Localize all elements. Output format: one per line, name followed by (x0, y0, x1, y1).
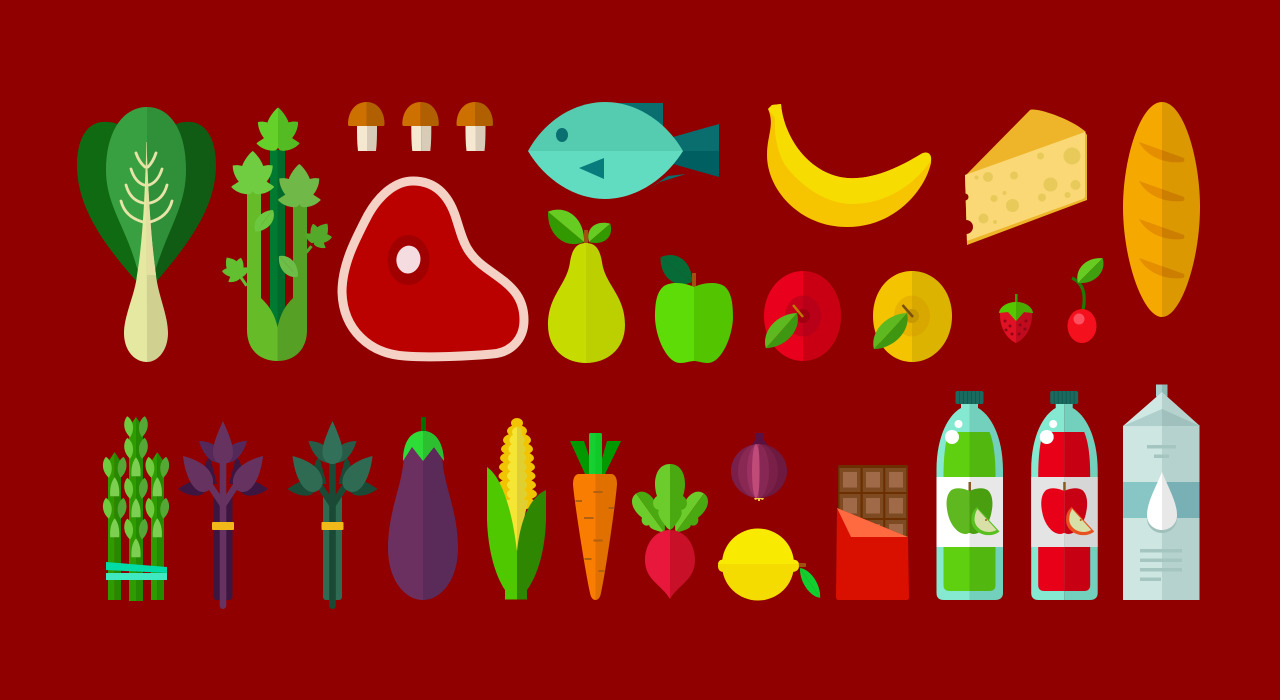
icon: green apple (653, 248, 733, 363)
icon: red apple (758, 271, 841, 361)
icon: milk carton (1123, 384, 1200, 600)
icon: steak (342, 181, 524, 357)
icon: corn (487, 418, 546, 600)
icon: yellow apple (866, 271, 952, 362)
icon: apple juice bottle (936, 391, 1003, 600)
icon: lemon (718, 528, 825, 601)
icon: celery (216, 108, 338, 361)
icon: chocolate bar (836, 465, 909, 600)
icon: bok choy (77, 107, 216, 362)
icon: cherry juice bottle (1031, 391, 1098, 600)
icon: pear (539, 201, 625, 363)
icon: asparagus bunch (102, 416, 170, 601)
icon: baguette (1123, 102, 1200, 317)
icon: fish (528, 102, 719, 199)
icon: radish (626, 464, 714, 599)
icon: eggplant (388, 417, 458, 600)
icon: mushrooms (348, 102, 493, 151)
icon: green herb bunch (288, 421, 378, 609)
icon: red onion (730, 433, 789, 501)
icon: strawberry (999, 294, 1033, 343)
icon: carrot (570, 433, 621, 600)
icon: cheese (959, 110, 1087, 245)
icon: banana (767, 104, 931, 227)
icon: purple herb bunch (178, 421, 268, 609)
icon: cherry (1068, 252, 1109, 343)
